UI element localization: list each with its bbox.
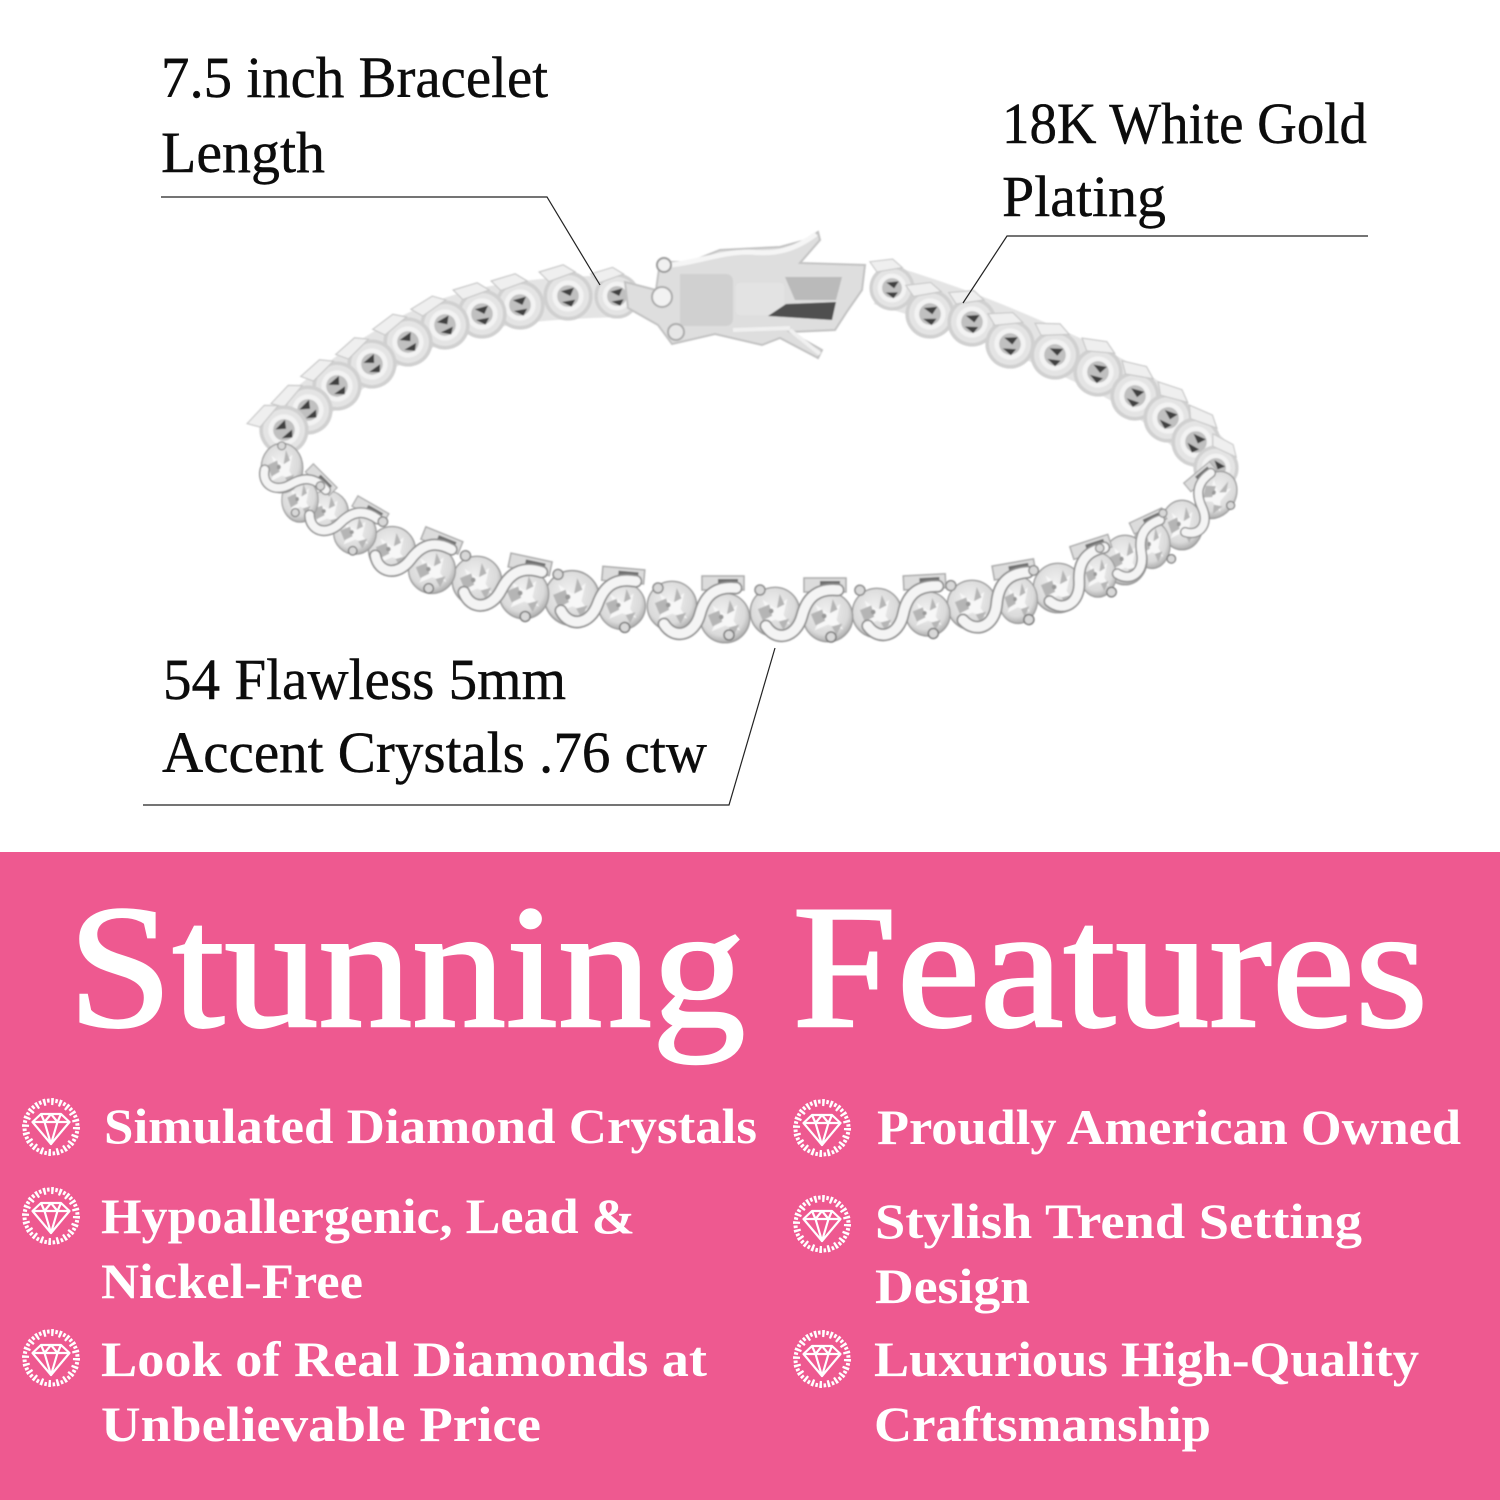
panel: stunning features	[0, 852, 1500, 1500]
bracelet	[243, 232, 1251, 643]
callout: crystals	[143, 647, 775, 805]
bracelet back links	[243, 255, 1251, 498]
callout: bracelet length	[161, 45, 600, 285]
feature: stylish design: Design	[875, 1258, 1030, 1314]
feature: look of real diamonds: Unbelievable Price	[101, 1396, 541, 1452]
feature: craftsmanship: Craftsmanship	[874, 1396, 1211, 1452]
feature: simulated diamond crystals: Simulated Diamond Crystals	[104, 1098, 757, 1154]
callout: plating: 18K White Gold	[1002, 91, 1367, 156]
feature: stylish design	[796, 1193, 1362, 1314]
callout: bracelet length: Length	[161, 120, 325, 185]
bracelet front stones	[261, 443, 1245, 643]
callout: crystals: 54 Flawless 5mm	[163, 647, 566, 712]
feature: craftsmanship	[796, 1331, 1419, 1452]
bracelet S-shaped settings	[249, 436, 1242, 642]
callout: crystals: Accent Crystals .76 ctw	[162, 720, 707, 785]
feature: look of real diamonds	[24, 1331, 707, 1452]
feature: look of real diamonds: Look of Real Diamonds at	[101, 1331, 707, 1387]
clasp	[625, 232, 865, 358]
feature: american owned: Proudly American Owned	[877, 1099, 1461, 1155]
heading: Stunning Features	[68, 870, 1428, 1065]
feature: stylish design: Stylish Trend Setting	[875, 1193, 1362, 1249]
callout: plating: Plating	[1002, 164, 1166, 229]
callout: plating	[963, 91, 1368, 303]
feature: craftsmanship: Luxurious High-Quality	[874, 1331, 1419, 1387]
feature: hypoallergenic	[24, 1188, 635, 1309]
feature: hypoallergenic: Nickel-Free	[101, 1253, 363, 1309]
callout: bracelet length: 7.5 inch Bracelet	[161, 45, 548, 110]
feature: hypoallergenic: Hypoallergenic, Lead &	[101, 1188, 635, 1244]
